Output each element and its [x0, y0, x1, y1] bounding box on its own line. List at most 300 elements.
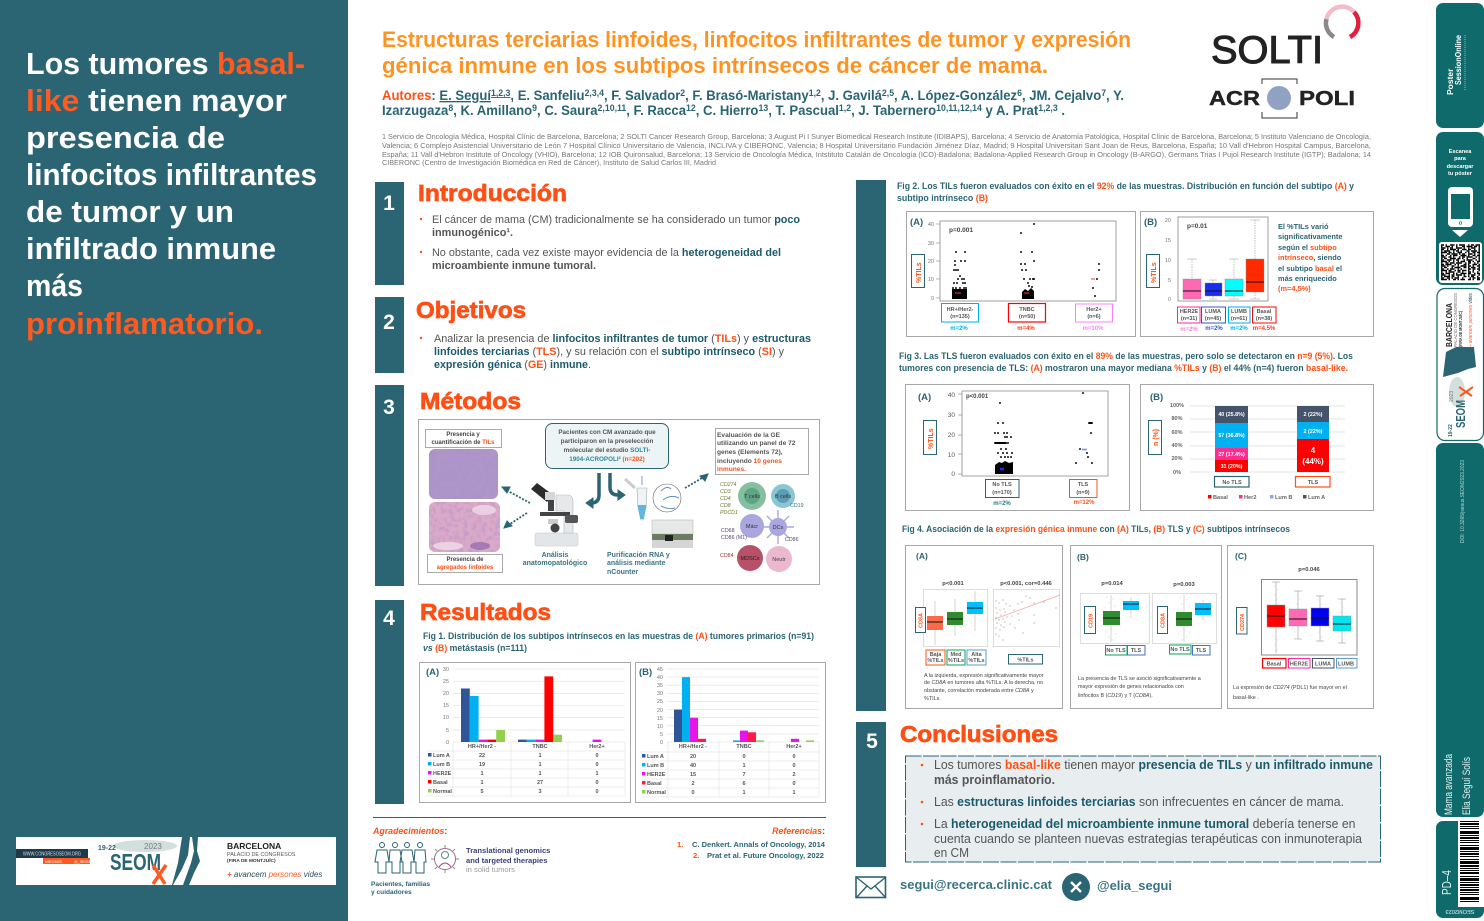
label: TILs: Presencia y	[446, 432, 480, 438]
affiliations: Valencia; 6 Complejo Asistencial Universitario de León 7 Hospital Clínico Universitario de Valencia, INCLIVA y CIBERONC, Valencia; 8 Hospital Universitario Fundación Jiménez Díaz, Madrid; 9 Hospital Universitari Sant Joan de Reus, Barcelona, España; 10 Vall d'Hebron Hospital Campus, Barcelona,	[382, 143, 1371, 150]
data table: TNBC	[532, 744, 548, 750]
sidebar: PosterSessionOnline card: Poster	[1445, 68, 1455, 95]
chart: Fig 1 B: 15	[657, 716, 663, 722]
logo: translational genomics: and targeted therapies	[466, 856, 547, 865]
authors: .	[1058, 103, 1065, 118]
authors: 6	[1017, 88, 1022, 98]
category labels: m=12%	[1074, 500, 1095, 506]
chart: Fig 2 B boxplot: 15	[1165, 238, 1171, 244]
chart: Fig 2 A scatter: p=0.001	[949, 227, 973, 234]
label: TILs	[426, 430, 502, 448]
chart: Fig 3 B stacked bars: 0%	[1173, 470, 1181, 476]
axis label: CD8A	[918, 613, 924, 628]
immune cells: DCs	[773, 525, 784, 531]
bar: No TLS: 31 (20%)	[1221, 464, 1243, 470]
chart: Fig 3 A scatter: 30	[948, 412, 955, 419]
contact: email	[856, 877, 1053, 898]
category labels: No TLS	[1106, 648, 1126, 654]
legend: Her2	[1244, 495, 1256, 501]
chart: Fig 2 B boxplot: 0	[1168, 297, 1171, 303]
label: purificación: Purificación RNA y	[607, 552, 670, 559]
category labels: m=2%	[950, 326, 968, 332]
congress banner: WWW.CONGRESOSEOM.ORG	[23, 852, 81, 858]
data table: 20	[690, 754, 696, 760]
authors: , A. López-González	[894, 88, 1017, 103]
chart: Fig 1 A: 5	[446, 728, 449, 734]
conclusions box: Las estructuras linfoides terciarias son infrecuentes en cáncer de mama.	[934, 795, 1344, 809]
data table: HR+/Her2 -	[679, 744, 707, 750]
figure 3 caption: Fig 3. Las TLS fueron evaluados con éxito en el 89% de las muestras, pero solo se detectaron en n=9 (5%). Los	[899, 351, 1353, 361]
immune cells: Mácr	[746, 524, 758, 530]
sidebar: poster code and barcode: PD–4	[1440, 870, 1454, 895]
chart: Fig 1 B: 40	[657, 675, 663, 681]
data table: Normal	[647, 790, 666, 796]
section 3: Métodos	[375, 385, 820, 586]
title: génica inmune en los subtipos intrínsecos de cáncer de mama.	[382, 53, 1048, 78]
label: agregados	[428, 554, 502, 572]
chart: Fig 2 A scatter: 10	[928, 277, 934, 283]
section 2: Objetivos: Objetivos	[416, 297, 526, 323]
sidebar: PosterSessionOnline card: SessionOnline	[1454, 35, 1463, 85]
headline message: linfocitos infiltrantes	[26, 157, 317, 192]
axis label: CD274	[1240, 613, 1246, 631]
immune cells: CD86	[785, 537, 799, 543]
data table	[427, 742, 625, 796]
immune cells: CD19	[790, 503, 804, 509]
headline message: Los tumores basal-	[26, 46, 305, 81]
center patient box: 1904-ACROPOLI² (n=202)	[569, 456, 645, 463]
note: según el subtipo	[1278, 243, 1337, 252]
category labels: Baja	[930, 652, 942, 658]
chart: Fig 3 B stacked bars	[1140, 384, 1374, 510]
data table: TNBC	[736, 744, 752, 750]
data table: 0	[792, 754, 796, 760]
sidebar: poster code and barcode	[1436, 821, 1484, 918]
right gene panel text box: genes (Elements 72),	[717, 449, 783, 456]
legend: Lum A	[1308, 495, 1325, 501]
authors: , F. Salvador	[604, 88, 681, 103]
chart: Fig 1 B: 25	[657, 699, 663, 705]
category labels	[942, 304, 1112, 332]
chart: Fig 3 A scatter: (A)	[918, 392, 931, 403]
figure 2 caption: Fig 2. Los TILs fueron evaluados con éxito en el 92% de las muestras. Distribución en función del subtipo (A) y	[897, 181, 1354, 191]
data table: 1	[538, 771, 542, 777]
label: purificación: nCounter	[607, 569, 638, 576]
section 4 continued: right column bar	[856, 180, 886, 711]
references list: Prat et al. Future Oncology, 2022	[707, 851, 824, 860]
authors	[382, 88, 1124, 118]
chart: Fig 1 B: 30	[657, 691, 663, 697]
chart: Fig 3 B stacked bars: 20%	[1171, 456, 1183, 462]
conclusions box	[906, 756, 1380, 862]
chart: Fig 1 B: 35	[657, 683, 663, 689]
immune cells: MDSCs	[741, 556, 760, 562]
chart: Fig 4 A: p<0.001, cor=0.446	[1000, 581, 1053, 587]
axis label: n (%)	[1153, 429, 1160, 446]
sidebar: Barcelona SEOM card: BARCELONA	[1445, 303, 1454, 347]
logo: Acropoli: POLI	[1299, 88, 1355, 110]
center patient box	[546, 424, 668, 468]
data table: 0	[742, 754, 746, 760]
authors: 9	[532, 103, 537, 113]
section 4: Resultados: Resultados	[420, 599, 551, 625]
headline message: like tienen mayor	[26, 83, 287, 118]
data table: 1	[538, 762, 542, 768]
data table: 15	[690, 772, 696, 778]
note	[1278, 222, 1342, 293]
category labels	[1178, 307, 1276, 333]
chart: Fig 2 A scatter	[906, 212, 1136, 336]
category labels: m=10%	[1083, 326, 1104, 332]
chart: Fig 4 C: (C)	[1235, 551, 1247, 561]
figure 1 caption	[423, 631, 814, 653]
category labels: m=2%	[993, 501, 1011, 507]
category labels: m=4.5%	[1253, 326, 1276, 332]
authors: Autores: E. Seguí	[382, 88, 493, 103]
immune cells	[720, 482, 804, 572]
authors: 2	[680, 88, 685, 98]
affiliations	[382, 134, 1371, 167]
icon: microscope	[531, 483, 578, 546]
chart: Fig 2 A scatter: 0	[931, 296, 934, 302]
section 2: Objetivos: 2	[383, 311, 395, 334]
figure 1 caption: Fig 1. Distribución de los subtipos intrínsecos en las muestras de (A) tumores primarios (n=91)	[423, 631, 814, 641]
conclusions box: La heterogeneidad del microambiente inmune tumoral debería tenerse en	[934, 817, 1356, 831]
data table: 1	[480, 771, 484, 777]
logo: Acropoli	[1209, 79, 1355, 118]
chart: Fig 3 A scatter: 40	[948, 392, 955, 399]
sidebar: Barcelona SEOM card: SEOM	[1453, 400, 1468, 428]
contact: X handle	[1062, 873, 1172, 901]
icon: tube and RNA	[625, 476, 681, 520]
chart: Fig 1 A: 20	[443, 691, 449, 697]
authors: 7	[1101, 88, 1106, 98]
axis label	[916, 608, 926, 632]
chart: Fig 1 A: (A)	[426, 667, 439, 678]
section 4: Resultados: 4	[383, 607, 395, 630]
axis labels	[1084, 606, 1168, 634]
category labels: (n=170)	[992, 490, 1012, 496]
data table: Her2+	[589, 744, 605, 750]
center patient box: participaron en la preselección	[561, 438, 654, 445]
sidebar: topic and author card: Mama avanzada	[1443, 753, 1455, 815]
chart: Fig 1 A: 15	[443, 703, 449, 709]
histology image 1	[429, 449, 498, 499]
category labels: HR+/Her2-	[947, 307, 974, 313]
headline message: proinflamatorio.	[26, 306, 263, 341]
category labels: (n=9)	[1076, 490, 1090, 496]
chart: Fig 2 B boxplot: p=0.01	[1187, 223, 1208, 230]
chart: Fig 1 B: 0	[660, 740, 663, 746]
authors: 1,2,3	[491, 88, 510, 98]
data table: 5	[480, 789, 484, 795]
category labels: TLS	[1078, 482, 1089, 488]
chart: Fig 1 B: 45	[657, 667, 663, 673]
label: purificación: análisis mediante	[607, 560, 665, 567]
immune cells: CD84	[720, 553, 734, 559]
arrows: flow from patients	[586, 473, 625, 508]
affiliations: CIBERONC (Centro de Investigación Biomédica en Red de Cáncer), Instituto de Salud Carlos III, Madrid	[382, 160, 716, 167]
authors: 2,5	[882, 88, 894, 98]
section 2: Objetivos	[375, 297, 811, 373]
data table: 0	[792, 763, 796, 769]
right gene panel text box: Evaluación de la GE	[717, 432, 781, 439]
authors: , C. Hierro	[696, 103, 758, 118]
immune cells: CD4	[720, 496, 731, 502]
chart: Fig 1 A: 25	[443, 679, 449, 685]
data table: Lum B	[433, 762, 450, 768]
chart: Fig 1 A: 30	[443, 667, 449, 673]
data table: Lum B	[647, 763, 664, 769]
section 5: Conclusiones: 5	[866, 730, 878, 753]
category labels: m=2%	[1205, 326, 1223, 332]
bar: No TLS	[1215, 406, 1248, 472]
label: purificación	[607, 552, 670, 576]
authors: 13	[758, 103, 768, 113]
chart: Fig 3 A scatter: 10	[948, 452, 955, 459]
chart: Fig 3 B stacked bars: 80%	[1171, 416, 1183, 422]
congress banner: @_SEOM	[74, 860, 90, 864]
data table: HER2E	[647, 772, 666, 778]
figure 2 caption	[897, 181, 1354, 203]
category labels: (n=45)	[1205, 316, 1221, 322]
data table: 1	[742, 763, 746, 769]
logo: translational genomics	[431, 845, 550, 874]
data table: 0	[595, 753, 599, 759]
authors: 2,10,11	[598, 103, 626, 113]
data table: 0	[691, 790, 695, 796]
authors: 2,3,4	[585, 88, 604, 98]
figure 4 caption: Fig 4. Asociación de la expresión génica inmune con (A) TILs, (B) TLS y (C) subtipos intrínsecos	[902, 524, 1290, 534]
chart: Fig 3 B stacked bars: 60%	[1171, 430, 1183, 436]
authors: , JM. Cejalvo	[1022, 88, 1101, 103]
category labels: Med	[950, 652, 962, 658]
chart: Fig 2 B boxplot: (B)	[1144, 217, 1157, 228]
sidebar: QR download card: descargar	[1447, 164, 1474, 170]
boxes	[1183, 220, 1264, 299]
icon: phone	[1448, 187, 1473, 237]
axis label	[1148, 420, 1162, 454]
authors: , K. Amillano	[453, 103, 532, 118]
category labels: LUMA	[1205, 309, 1221, 315]
data table: 6	[742, 781, 746, 787]
right gene panel text box: utilizando un panel de 72	[717, 440, 796, 447]
bar: TLS: 4	[1311, 446, 1316, 455]
chart: Fig 4 A: p<0.001	[942, 581, 964, 587]
category labels: No TLS	[1222, 480, 1242, 486]
data table: 0	[595, 780, 599, 786]
section 1: Introducción	[375, 180, 800, 285]
bar: TLS: 2 (22%)	[1304, 412, 1323, 418]
note	[1233, 685, 1347, 701]
scatter points	[995, 393, 1092, 474]
label: TILs: cuantificación de TILs	[431, 440, 495, 446]
section 1: Introducción: microambiente inmune tumoral.	[432, 260, 596, 272]
title: Estructuras terciarias linfoides, linfocitos infiltrantes de tumor y expresión	[382, 27, 1131, 52]
note: mayor expresión de genes relacionados con	[1078, 684, 1184, 690]
authors: , F. Racca	[626, 103, 687, 118]
note: (m=4.5%)	[1278, 284, 1311, 293]
section 2: Objetivos: expresión génica (GE) inmune.	[434, 359, 591, 371]
data table: 2	[691, 781, 695, 787]
category labels: Alta	[971, 652, 983, 658]
category labels: m=2%	[1180, 327, 1198, 333]
headline message: presencia de	[26, 120, 225, 155]
references list: 1.	[677, 840, 683, 849]
bars	[461, 676, 601, 742]
category labels: %TILs	[948, 658, 964, 664]
sidebar: Barcelona SEOM card: PALACIO DE CONGRESOS	[1453, 293, 1458, 347]
congress banner: (FIRA DE MONTJUÏC)	[227, 857, 276, 864]
immune cells: Neutr	[772, 557, 786, 563]
category labels: HER2E	[1180, 309, 1198, 315]
boxes	[1267, 582, 1351, 653]
scatter points	[952, 224, 1099, 299]
chart: Fig 3 A scatter	[906, 384, 1130, 510]
congress banner: 2023	[144, 842, 162, 851]
authors: , T. Pascual	[768, 103, 839, 118]
note: La expresión de CD274 (PDL1) fue mayor en el	[1233, 685, 1347, 691]
chart: Fig 1 B: 5	[660, 732, 663, 738]
references list	[677, 840, 826, 860]
immune cells: CD3	[720, 489, 731, 495]
right gene panel text box: inmunes.	[717, 466, 746, 473]
conclusions box: cuenta cuando se planteen nuevas estrategias terapéuticas con inmunoterapia	[934, 832, 1362, 846]
icon: nCounter	[652, 520, 693, 548]
chart: Fig 3 A scatter: 0	[951, 471, 955, 478]
category labels: Her2+	[1086, 307, 1102, 313]
logo: Acropoli: ACR	[1209, 88, 1261, 110]
references list: 2.	[693, 851, 699, 860]
axis label: %TILs	[916, 262, 923, 283]
immune cells: CD8	[720, 503, 731, 509]
center patient box: molecular del estudio SOLTI-	[564, 447, 650, 454]
sidebar: topic and author card: DOI: 10.3265/jseous.SEOM2023.2023	[1460, 460, 1466, 543]
center patient box: Pacientes con CM avanzado que	[558, 429, 656, 436]
sidebar: PosterSessionOnline card	[1436, 3, 1484, 128]
authors: , Y.	[1106, 88, 1124, 103]
sidebar: Barcelona SEOM card: + avancem persones vides	[1468, 293, 1474, 347]
boxes	[1103, 595, 1211, 642]
data table: HR+/Her2 -	[468, 744, 496, 750]
footer: acknowledgements and references	[371, 818, 826, 896]
legend: Lum B	[1275, 495, 1292, 501]
chart: Fig 3 B stacked bars: 100%	[1170, 403, 1184, 409]
chart: Fig 2 A scatter: 40	[928, 222, 934, 228]
authors: 8	[448, 103, 453, 113]
chart: Fig 2 B boxplot: 10	[1165, 258, 1171, 264]
data table: 3	[538, 789, 542, 795]
sidebar: poster code and barcode: SEOM2023	[1445, 908, 1475, 914]
section 2: Objetivos: Analizar la presencia de linfocitos infiltrantes de tumor (TILs) y estructuras	[434, 333, 811, 345]
sidebar: QR download card: tu póster	[1448, 171, 1473, 177]
chart: Fig 2 B boxplot: 5	[1168, 278, 1171, 284]
category labels: (n=6)	[1087, 314, 1101, 320]
chart: Fig 3 B stacked bars: 40%	[1171, 443, 1183, 449]
panel: left teal column	[0, 0, 348, 921]
bar: No TLS: 57 (36.8%)	[1218, 433, 1245, 439]
axis label	[912, 254, 924, 288]
category labels	[986, 480, 1097, 507]
data table: 27	[537, 780, 543, 786]
note: intrínseco, siendo	[1278, 253, 1342, 262]
sidebar: topic and author card: Elia Seguí Solís	[1461, 757, 1473, 815]
sidebar: QR download card: Escanea	[1449, 149, 1472, 155]
section 3: Métodos: Métodos	[420, 388, 521, 414]
category labels	[926, 650, 1042, 665]
bar: No TLS: 40 (25.8%)	[1218, 412, 1245, 418]
congress banner: SEOM	[110, 849, 161, 875]
congress banner: + avancem persones vides	[227, 870, 322, 879]
chart: Fig 1 B: (B)	[639, 667, 652, 678]
immune cells: B cells	[775, 494, 791, 500]
chart: Fig 1 B: 10	[657, 724, 663, 730]
logo: translational genomics: in solid tumors	[466, 865, 515, 874]
data table: Lum A	[647, 754, 664, 760]
data table: 1	[480, 780, 484, 786]
bars	[674, 677, 814, 742]
data table: Normal	[433, 789, 452, 795]
axis labels: CD19	[1088, 614, 1094, 628]
chart: Fig 3 B stacked bars: (B)	[1150, 392, 1163, 403]
category labels: TLS	[1308, 480, 1319, 486]
axis label	[1236, 608, 1247, 634]
category labels: No TLS	[1170, 647, 1190, 653]
axis label	[924, 420, 936, 454]
sidebar: QR download card: para	[1454, 156, 1467, 162]
category labels: Basal	[1257, 309, 1272, 315]
chart: Fig 4 B: p=0.003	[1173, 582, 1195, 588]
logo: SOLTI: SOLTI	[1211, 29, 1323, 72]
chart: Fig 2 A scatter: 20	[928, 259, 934, 265]
data table: Basal	[647, 781, 662, 787]
footer: acknowledgements and references: Referencias:	[772, 826, 825, 836]
congress banner	[16, 837, 336, 885]
bar: TLS: 2 (22%)	[1304, 429, 1323, 435]
section 4: Resultados	[375, 599, 826, 804]
authors: , C. Saura	[537, 103, 598, 118]
legend	[1208, 495, 1325, 501]
data table: 40	[690, 763, 696, 769]
conclusions box: Los tumores basal-like tienen mayor presencia de TILs y un infiltrado inmune	[934, 758, 1373, 772]
label: agregados: agregados linfoides	[437, 565, 494, 571]
authors: 10,11,12,14	[936, 103, 982, 113]
data table: 1	[742, 790, 746, 796]
legend: Basal	[1213, 495, 1228, 501]
chart: Fig 1 A	[420, 662, 630, 802]
note: %TILs.	[924, 696, 941, 702]
category labels: (n=61)	[1231, 316, 1247, 322]
data table: Her2+	[786, 744, 802, 750]
note: significativamente	[1278, 232, 1342, 241]
right gene panel text box: incluyendo 10 genes	[717, 458, 782, 465]
figure 2 caption: subtipo intrínseco (B)	[897, 193, 988, 203]
category labels: TLS	[1196, 648, 1207, 654]
note: La presencia de TLS se asoció significativamente a	[1078, 676, 1201, 682]
section 1: Introducción: inmunogénico¹.	[432, 227, 513, 239]
category labels: m=2%	[1230, 326, 1248, 332]
category labels: TNBC	[1019, 307, 1035, 313]
note	[1078, 676, 1201, 699]
data table: 1	[595, 771, 599, 777]
category labels: TLS	[1131, 648, 1142, 654]
affiliations: España; 11 Vall d'Hebron Institute of Oncology (VHIO), Barcelona; 12 IOB Quironsalud, Barcelona; 13 Servicio de Oncología Médica, Intstituto Catalán de Oncología (ICO)-Badalona; Badalona-Applied Research Group in Oncology (B-ARGO), Germans Trias I Pujol Research Institute (IGTP); Badalona; 14	[382, 152, 1371, 159]
chart: Fig 2 B boxplot: 20	[1165, 218, 1171, 224]
references list: C. Denkert. Annals of Oncology, 2014	[692, 840, 826, 849]
histology image 2	[429, 502, 500, 552]
category labels: LUMA	[1315, 662, 1331, 668]
category labels: %TILs	[968, 658, 985, 664]
